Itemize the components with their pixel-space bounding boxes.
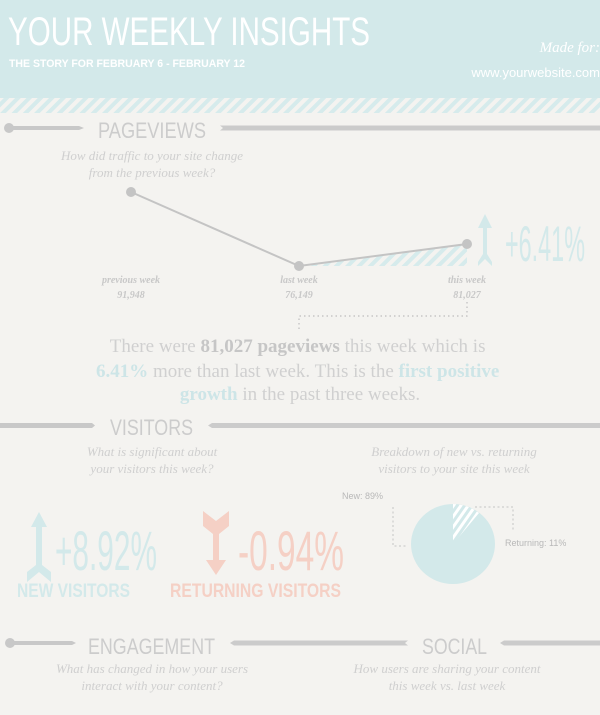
- social question: How users are sharing your content: [353, 661, 541, 676]
- engagement question: What has changed in how your users: [56, 661, 248, 676]
- line chart: previous week: [101, 275, 160, 286]
- section header: pageviews: PAGEVIEWS: [98, 118, 206, 143]
- visitors question: What is significant about: [87, 444, 218, 459]
- engagement question: interact with your content?: [81, 678, 223, 693]
- header: [0, 0, 600, 113]
- section header: pageviews: [4, 118, 600, 143]
- summary paragraph: 6.41% more than last week. This is the first positive: [96, 361, 499, 382]
- subtitle: THE STORY FOR FEBRUARY 6 - FEBRUARY 12: [9, 58, 245, 70]
- line chart: 81,027: [453, 290, 482, 301]
- section header: engagement & social: [5, 634, 600, 659]
- made for: Made for:: [539, 40, 600, 56]
- new visitors stat: NEW VISITORS: [17, 581, 130, 602]
- section header: visitors: VISITORS: [110, 415, 193, 440]
- pie chart: [342, 491, 566, 584]
- new visitors stat: [17, 512, 157, 602]
- dotted connector: [299, 302, 467, 331]
- new visitors stat: +8.92%: [55, 519, 157, 582]
- breakdown question: visitors to your site this week: [378, 461, 530, 476]
- pageviews question: from the previous week?: [89, 165, 216, 180]
- returning visitors stat: -0.94%: [238, 519, 344, 582]
- line chart: [101, 187, 486, 301]
- line chart: 91,948: [117, 290, 145, 301]
- up arrow + 6.41%: [478, 214, 585, 272]
- title: YOUR WEEKLY INSIGHTS: [8, 10, 370, 54]
- section header: engagement & social: ENGAGEMENT: [88, 634, 215, 659]
- pageviews question: How did traffic to your site change: [60, 148, 243, 163]
- summary paragraph: growth in the past three weeks.: [180, 384, 420, 405]
- line chart: 76,149: [285, 290, 313, 301]
- returning visitors stat: RETURNING VISITORS: [170, 581, 341, 602]
- line chart: this week: [448, 275, 486, 286]
- pie chart: Returning: 11%: [505, 538, 566, 548]
- visitors question: your visitors this week?: [88, 461, 214, 476]
- social question: this week vs. last week: [389, 678, 506, 693]
- returning visitors stat: [170, 511, 344, 602]
- section header: engagement & social: SOCIAL: [422, 634, 487, 659]
- website: www.yourwebsite.com: [470, 65, 600, 80]
- section header: visitors: [0, 415, 600, 440]
- pie chart: New: 89%: [342, 491, 383, 501]
- summary paragraph: There were 81,027 pageviews this week which is: [110, 336, 485, 357]
- breakdown question: Breakdown of new vs. returning: [371, 444, 537, 459]
- line chart: last week: [280, 275, 318, 286]
